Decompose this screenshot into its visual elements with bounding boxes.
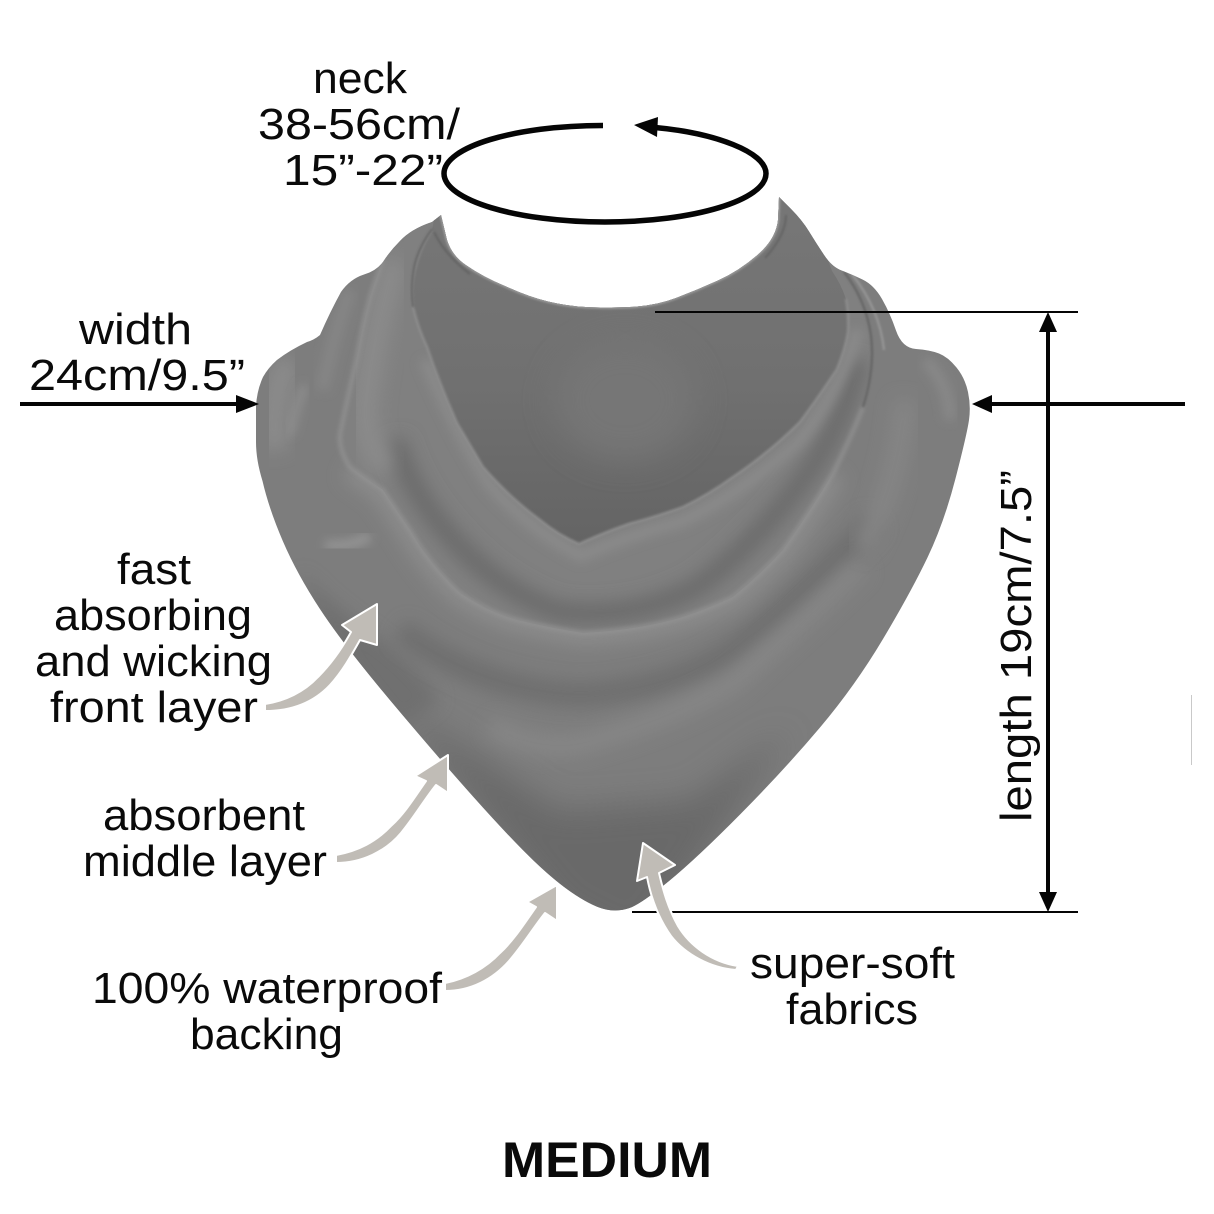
band shadow xyxy=(395,360,858,613)
waterproof label xyxy=(92,964,443,1059)
length guide line: bottom xyxy=(632,911,1078,913)
main fold body glow xyxy=(350,467,833,633)
neck label xyxy=(258,54,461,195)
size title: MEDIUM xyxy=(502,1132,712,1188)
lower body shading xyxy=(411,725,760,910)
neck measurement arrow xyxy=(444,117,766,222)
band edge highlight xyxy=(574,338,858,556)
fold rim highlight xyxy=(340,260,863,633)
third fold highlight xyxy=(731,567,853,680)
waterproof label: backing xyxy=(190,1010,343,1059)
length guide line: top xyxy=(655,311,1078,313)
width arrow: left xyxy=(20,395,259,413)
front layer label: front layer xyxy=(50,683,258,732)
width label xyxy=(29,305,245,400)
length arrow xyxy=(1039,312,1057,912)
panel soft light xyxy=(583,399,666,448)
middle layer label: middle layer xyxy=(83,837,327,886)
width arrow: right xyxy=(972,395,1185,413)
front layer label: absorbing xyxy=(54,591,252,640)
super-soft label: fabrics xyxy=(786,985,918,1034)
neck label: neck xyxy=(313,54,408,103)
middle layer label xyxy=(83,791,327,886)
middle layer label: absorbent xyxy=(103,791,305,840)
shoulder highlight xyxy=(274,360,290,450)
neck edge xyxy=(441,197,779,308)
scan mark xyxy=(1191,695,1192,765)
front layer label: fast xyxy=(117,545,191,594)
third fold shadow xyxy=(400,520,875,695)
band left light xyxy=(365,260,395,470)
waterproof label: 100% waterproof xyxy=(92,964,443,1013)
arrow: middle layer xyxy=(336,755,448,863)
left shoulder highlights xyxy=(325,536,370,546)
super-soft label: super-soft xyxy=(750,939,955,988)
panel rim xyxy=(412,230,848,544)
width label: 24cm/9.5” xyxy=(29,351,245,400)
front layer label: and wicking xyxy=(35,637,272,686)
neck label: 15”-22” xyxy=(283,146,443,195)
inner neck panel xyxy=(412,190,848,544)
super-soft label xyxy=(750,939,955,1034)
arrow: front layer xyxy=(265,604,377,711)
bib illustration xyxy=(256,197,970,910)
width label: width xyxy=(78,305,192,354)
neck label: 38-56cm/ xyxy=(258,100,461,149)
length label: length 19cm/7.5” xyxy=(992,470,1041,822)
crease lines xyxy=(412,229,432,307)
arrow: waterproof xyxy=(445,885,557,991)
right edge shading xyxy=(855,510,883,548)
front layer label xyxy=(35,545,272,732)
arrow: super-soft xyxy=(637,843,738,970)
collar band xyxy=(382,197,845,610)
